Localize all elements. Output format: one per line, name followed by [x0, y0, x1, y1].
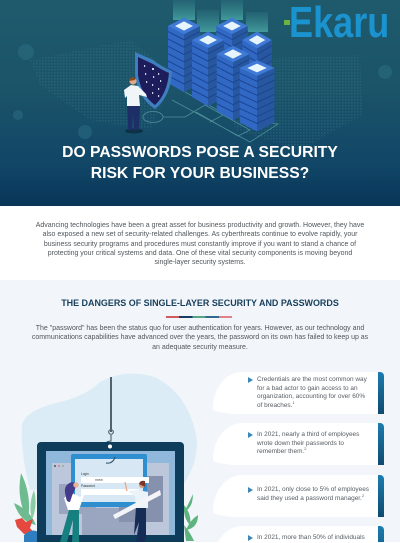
server towers: [168, 18, 274, 131]
card 2 background: [213, 423, 378, 465]
monitor: ****: [95, 479, 103, 485]
monitor: [37, 442, 184, 543]
intro text: protecting your critical systems and data. One of these vital security components is moving beyond: [48, 250, 352, 257]
intro text: also exposed a new set of security-related challenges. As cyberthreats continue to evolve rapidly, your: [43, 231, 357, 238]
security shield: [135, 52, 172, 109]
leaves right: [184, 494, 198, 541]
card 3 text: said they used a password manager.2: [257, 492, 364, 502]
section paragraph: The "password" has been the status quo for user authentication for years. However, as our technology and: [36, 325, 364, 332]
woman figure: [60, 482, 85, 542]
intro text: business security programs and procedures must constantly improve if you want to stand a chance of: [44, 240, 356, 248]
card 4 text: In 2021, more than 50% of individuals: [257, 534, 365, 541]
card 2: [213, 423, 384, 465]
card 4 arrow: [248, 535, 253, 541]
light beams: [173, 0, 268, 32]
card 4: [218, 526, 384, 542]
section paragraph: communications capabilities have advanced over the years, the password on its own has failed to keep up as: [32, 334, 368, 341]
section paragraph: [32, 324, 368, 350]
circuit lines: [143, 92, 278, 142]
logo green pixel: [284, 20, 290, 25]
hero illustration: [13, 0, 392, 148]
person: [124, 77, 147, 134]
card 2 text: remember them.2: [257, 446, 306, 455]
card 1 accent bar: [378, 372, 384, 414]
card 1 background: [213, 372, 378, 414]
monitor: Login: [81, 472, 89, 476]
card 3 background: [213, 475, 378, 517]
card 2 text: In 2021, nearly a third of employees: [257, 431, 359, 438]
title: DO PASSWORDS POSE A SECURITY: [62, 144, 338, 161]
intro text: single-layer security systems.: [154, 259, 246, 266]
section paragraph: an adequate security measure.: [152, 344, 248, 350]
card 1 text: for a bad actor to gain access to an: [257, 384, 358, 392]
card 3 accent bar: [378, 475, 384, 517]
hook line: [99, 377, 113, 454]
card 1 text: of breaches.1: [257, 399, 295, 408]
card 3: [213, 475, 384, 517]
card 2 arrow: [248, 432, 253, 438]
man figure: [113, 481, 161, 542]
intro text: Advancing technologies have been a great asset for business productivity and growth. However, they have: [36, 222, 364, 229]
bokeh circles: [13, 44, 392, 139]
title: RISK FOR YOUR BUSINESS?: [91, 165, 309, 182]
card 3 arrow: [248, 487, 253, 493]
illustration: login on monitor: [14, 374, 198, 542]
card 1 text: [257, 376, 367, 408]
section: dangers: [0, 280, 400, 542]
card 1: [213, 372, 384, 414]
card 4 accent bar: [378, 526, 384, 543]
intro text: [36, 222, 364, 266]
card 2 text: wrote down their passwords to: [257, 440, 344, 446]
card 1 text: Credentials are the most common way: [257, 376, 367, 383]
card 3 text: [257, 486, 369, 502]
section heading: THE DANGERS OF SINGLE-LAYER SECURITY AND PASSWORDS: [61, 298, 339, 308]
card 3 text: In 2021, only close to 5% of employees: [257, 486, 369, 493]
card 2 accent bar: [378, 423, 384, 465]
card 1 arrow: [248, 377, 253, 383]
heading divider: [166, 316, 232, 318]
monitor: Password: [81, 484, 95, 488]
background blob: [22, 373, 197, 490]
card 2 text: [257, 431, 360, 455]
logo: Ekaru: [284, 0, 389, 47]
title: [62, 144, 338, 182]
leaves left: [14, 473, 38, 542]
hero banner: [0, 0, 400, 206]
card 4 background: [213, 526, 378, 543]
card 1 text: organization, accounting for over 60%: [257, 393, 365, 400]
world map dots: [30, 40, 362, 150]
